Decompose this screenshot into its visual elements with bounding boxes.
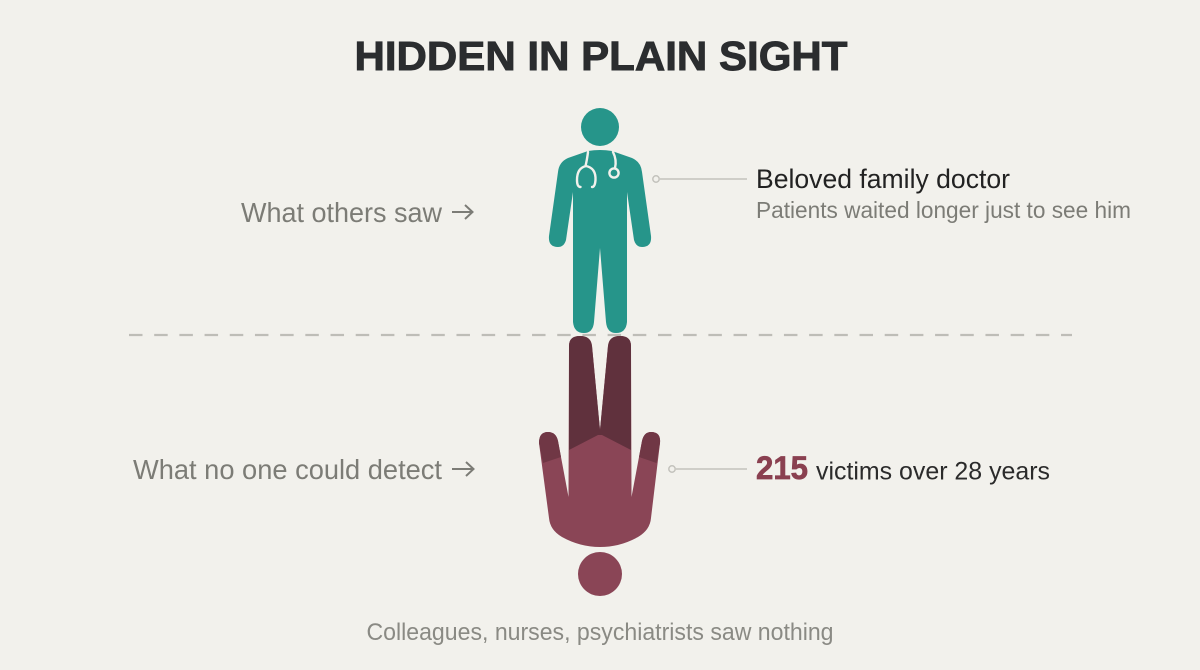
callout detail: Patients waited longer just to see him [756, 197, 1131, 223]
victims number: 215 [756, 450, 808, 486]
reflection shadow: left hand [539, 432, 561, 463]
icon: stethoscope [577, 152, 619, 187]
reflection body [539, 336, 660, 547]
label: what others saw: What others saw [241, 197, 443, 228]
callout heading: Beloved family doctor [756, 164, 1010, 194]
doctor head [581, 108, 619, 146]
doctor body [549, 150, 651, 333]
arrow: what no one could detect [452, 462, 474, 476]
callout: doctor [653, 164, 1131, 223]
footer note: Colleagues, nurses, psychiatrists saw nothing [366, 619, 834, 646]
connector line [660, 178, 747, 180]
title: HIDDEN IN PLAIN SIGHT [354, 33, 848, 79]
reflection shadow: right hand [639, 432, 660, 463]
figure: inverted reflection [539, 336, 660, 596]
figure: doctor [549, 108, 651, 333]
reflection head [578, 552, 622, 596]
victims text: victims over 28 years [816, 458, 1050, 486]
callout: victims [669, 450, 1050, 486]
dashed horizon line [129, 334, 1072, 336]
arrow: what others saw [452, 205, 472, 219]
label: what no one could detect: What no one could detect [133, 454, 442, 485]
connector line [676, 468, 747, 470]
reflection shadow: legs [569, 336, 631, 450]
